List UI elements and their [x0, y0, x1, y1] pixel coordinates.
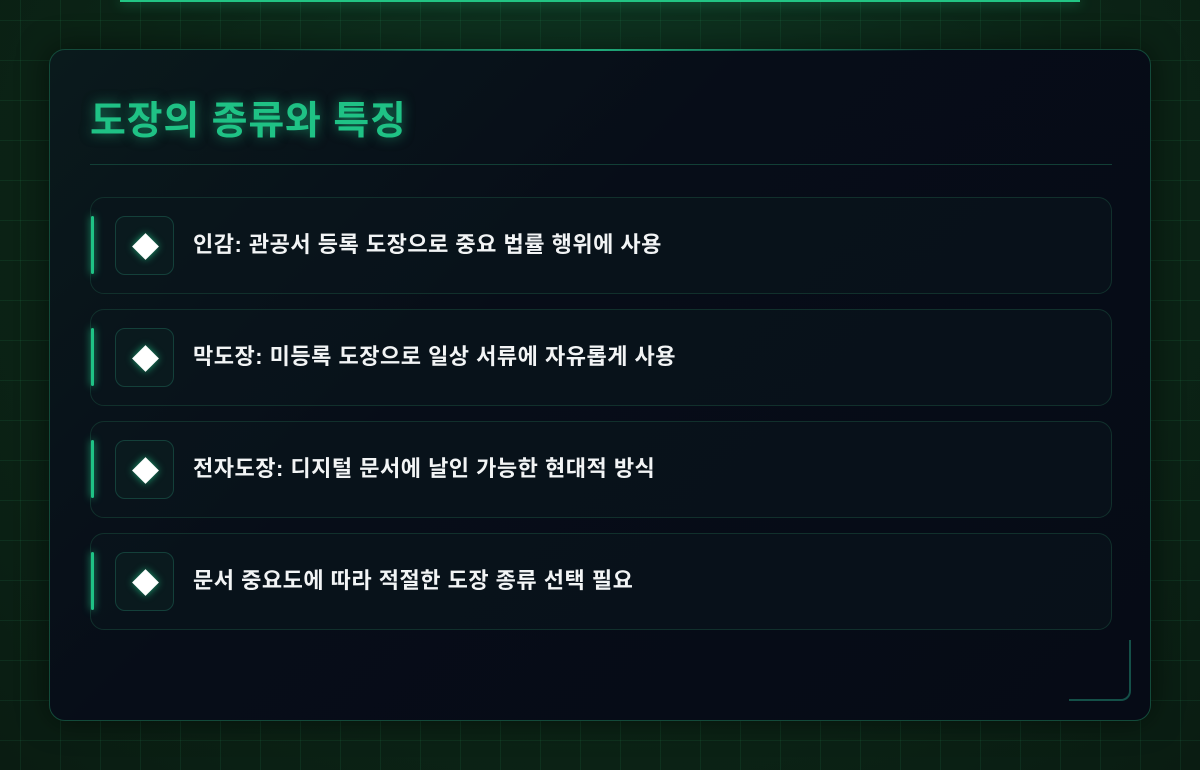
- text: 전자도장: 디지털 문서에 날인 가능한 현대적 방식: [193, 456, 655, 481]
- icon: diamond: [115, 440, 174, 499]
- item: 막도장: [90, 309, 1112, 406]
- item: 인감: [90, 197, 1112, 294]
- text: 막도장: 미등록 도장으로 일상 서류에 자유롭게 사용: [193, 344, 676, 369]
- icon: diamond: [115, 328, 174, 387]
- icon: diamond: [115, 552, 174, 611]
- corner accent: [1069, 640, 1131, 701]
- text: 문서 중요도에 따라 적절한 도장 종류 선택 필요: [193, 568, 633, 593]
- title: 도장의 종류와 특징: [90, 100, 407, 143]
- item: 전자도장: [90, 421, 1112, 518]
- text: 인감: 관공서 등록 도장으로 중요 법률 행위에 사용: [193, 232, 662, 257]
- item: 선택: [90, 533, 1112, 630]
- icon: diamond: [115, 216, 174, 275]
